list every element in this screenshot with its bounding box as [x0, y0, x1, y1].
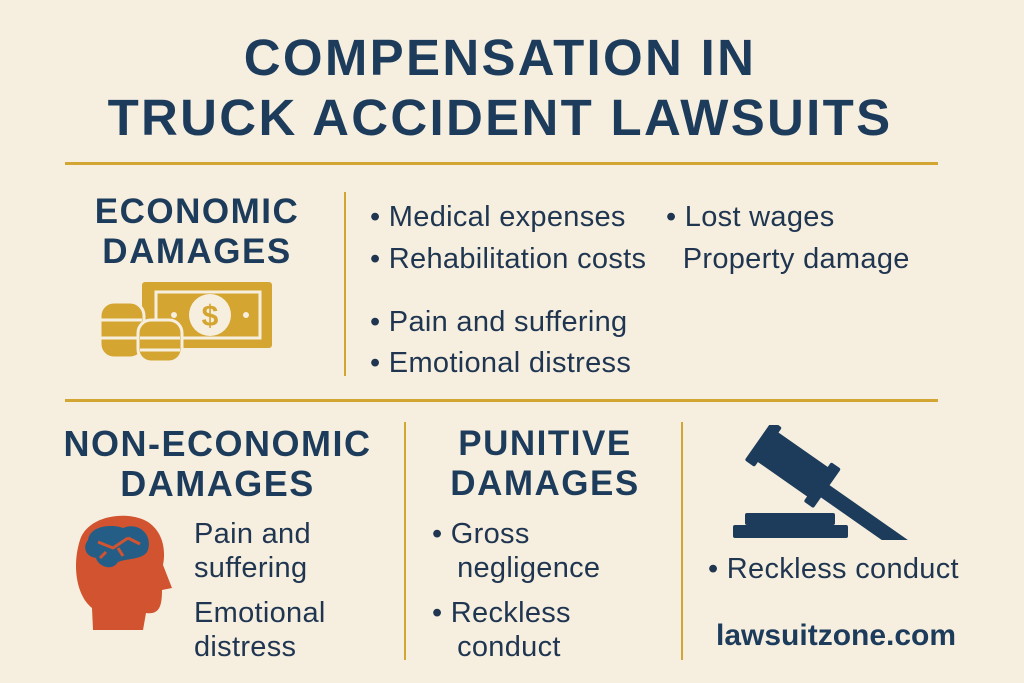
heading: economic damages: DAMAGES	[102, 232, 292, 271]
title: COMPENSATION IN	[244, 29, 756, 86]
heading: non-economic damages	[64, 423, 372, 504]
icon: gavel	[733, 425, 908, 540]
icon: head	[76, 516, 172, 630]
text: • Pain and suffering	[370, 306, 627, 338]
heading: economic damages: ECONOMIC	[95, 192, 299, 231]
text: • Lost wages	[666, 201, 835, 233]
icon: money	[102, 282, 272, 360]
text: Property damage	[683, 243, 910, 275]
punitive item: • Reckless conduct	[708, 553, 959, 585]
heading: punitive damages	[450, 424, 640, 503]
economic list: • Medical expenses	[370, 201, 626, 233]
non-economic list: Pain and	[194, 518, 311, 550]
title	[108, 29, 892, 146]
economic list: • Rehabilitation costs	[370, 243, 646, 275]
text: distress	[194, 631, 296, 663]
website: lawsuitzone.com	[716, 619, 956, 652]
economic list	[370, 201, 646, 275]
non-economic list	[194, 518, 311, 584]
punitive list: negligence	[457, 552, 600, 584]
punitive list: • Gross	[432, 518, 530, 550]
text: conduct	[457, 631, 561, 663]
heading: non-economic damages: NON-ECONOMIC	[64, 423, 372, 464]
heading: punitive damages: DAMAGES	[450, 464, 640, 503]
heading: non-economic damages: DAMAGES	[120, 463, 315, 504]
text: Emotional	[194, 597, 326, 629]
punitive list	[432, 518, 600, 584]
title: TRUCK ACCIDENT LAWSUITS	[108, 89, 892, 146]
text: • Reckless	[432, 597, 571, 629]
icon: money: $	[202, 300, 219, 333]
non-economic list: suffering	[194, 552, 307, 584]
heading: punitive damages: PUNITIVE	[458, 424, 632, 463]
text: • Emotional distress	[370, 347, 631, 379]
heading: economic damages	[95, 192, 299, 271]
